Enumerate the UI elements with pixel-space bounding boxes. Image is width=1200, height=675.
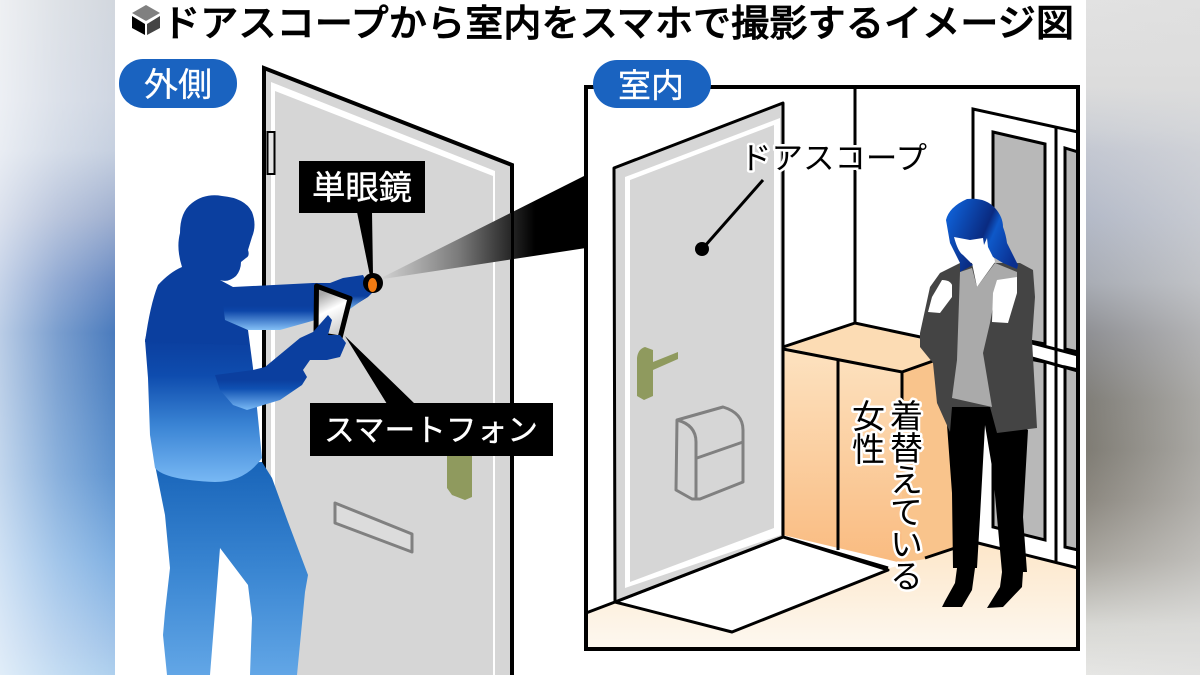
balcony door: [973, 108, 1078, 568]
outer door: [264, 68, 512, 675]
door hinge: [268, 132, 274, 174]
badge: outside: [119, 59, 237, 108]
lower arm and hand: [215, 315, 346, 410]
head and shoulders: [145, 195, 254, 345]
label: monocular: [299, 161, 425, 276]
floor: [586, 537, 1078, 650]
label: door scope: ドアスコープ: [740, 141, 927, 176]
man silhouette: [145, 195, 383, 675]
pants: [155, 462, 308, 675]
label: woman changing clothes: [848, 399, 922, 592]
badge: inside: [593, 60, 711, 108]
badge: outside: 外側: [144, 66, 212, 103]
shirt: [952, 263, 1017, 407]
torso: [145, 320, 262, 482]
legs: [947, 398, 1028, 572]
title: [132, 3, 1074, 44]
raised arm: [220, 275, 372, 330]
icon: cube: [132, 5, 160, 35]
hand gradient: [342, 296, 368, 311]
panel: inside room: [586, 60, 1078, 650]
shoes: [942, 568, 975, 607]
door handle: [447, 456, 472, 500]
inner handle: [637, 347, 678, 400]
entrance mat: [615, 537, 888, 632]
title text: ドアスコープから室内をスマホで撮影するイメージ図: [162, 3, 1074, 44]
panel: outside: [119, 59, 586, 675]
label: woman changing clothes: 着替えている: [886, 399, 922, 592]
label: monocular: 単眼鏡: [312, 169, 412, 206]
back wall corner: [854, 87, 856, 323]
door scope: [695, 242, 709, 256]
sight beam: [383, 175, 586, 279]
blurred background: left: [0, 0, 115, 675]
monocular: [363, 273, 383, 293]
inner door: [614, 103, 783, 602]
woman: [920, 199, 1037, 608]
face and neck: [954, 232, 995, 287]
hands: [928, 280, 952, 313]
label: smartphone: スマートフォン: [324, 413, 538, 448]
shoe cabinet: [783, 323, 955, 568]
door guard box: [676, 407, 743, 499]
scope leader line: [704, 180, 763, 247]
blurred background: right: [1086, 0, 1200, 675]
hair: [946, 199, 1018, 272]
label: woman changing clothes: 女性: [848, 399, 885, 465]
smartphone: [316, 286, 350, 338]
badge: inside: 室内: [618, 67, 684, 104]
label: smartphone: [310, 336, 553, 456]
room frame: [586, 87, 1078, 649]
mail slot: [335, 503, 412, 552]
jacket: [920, 263, 1037, 433]
